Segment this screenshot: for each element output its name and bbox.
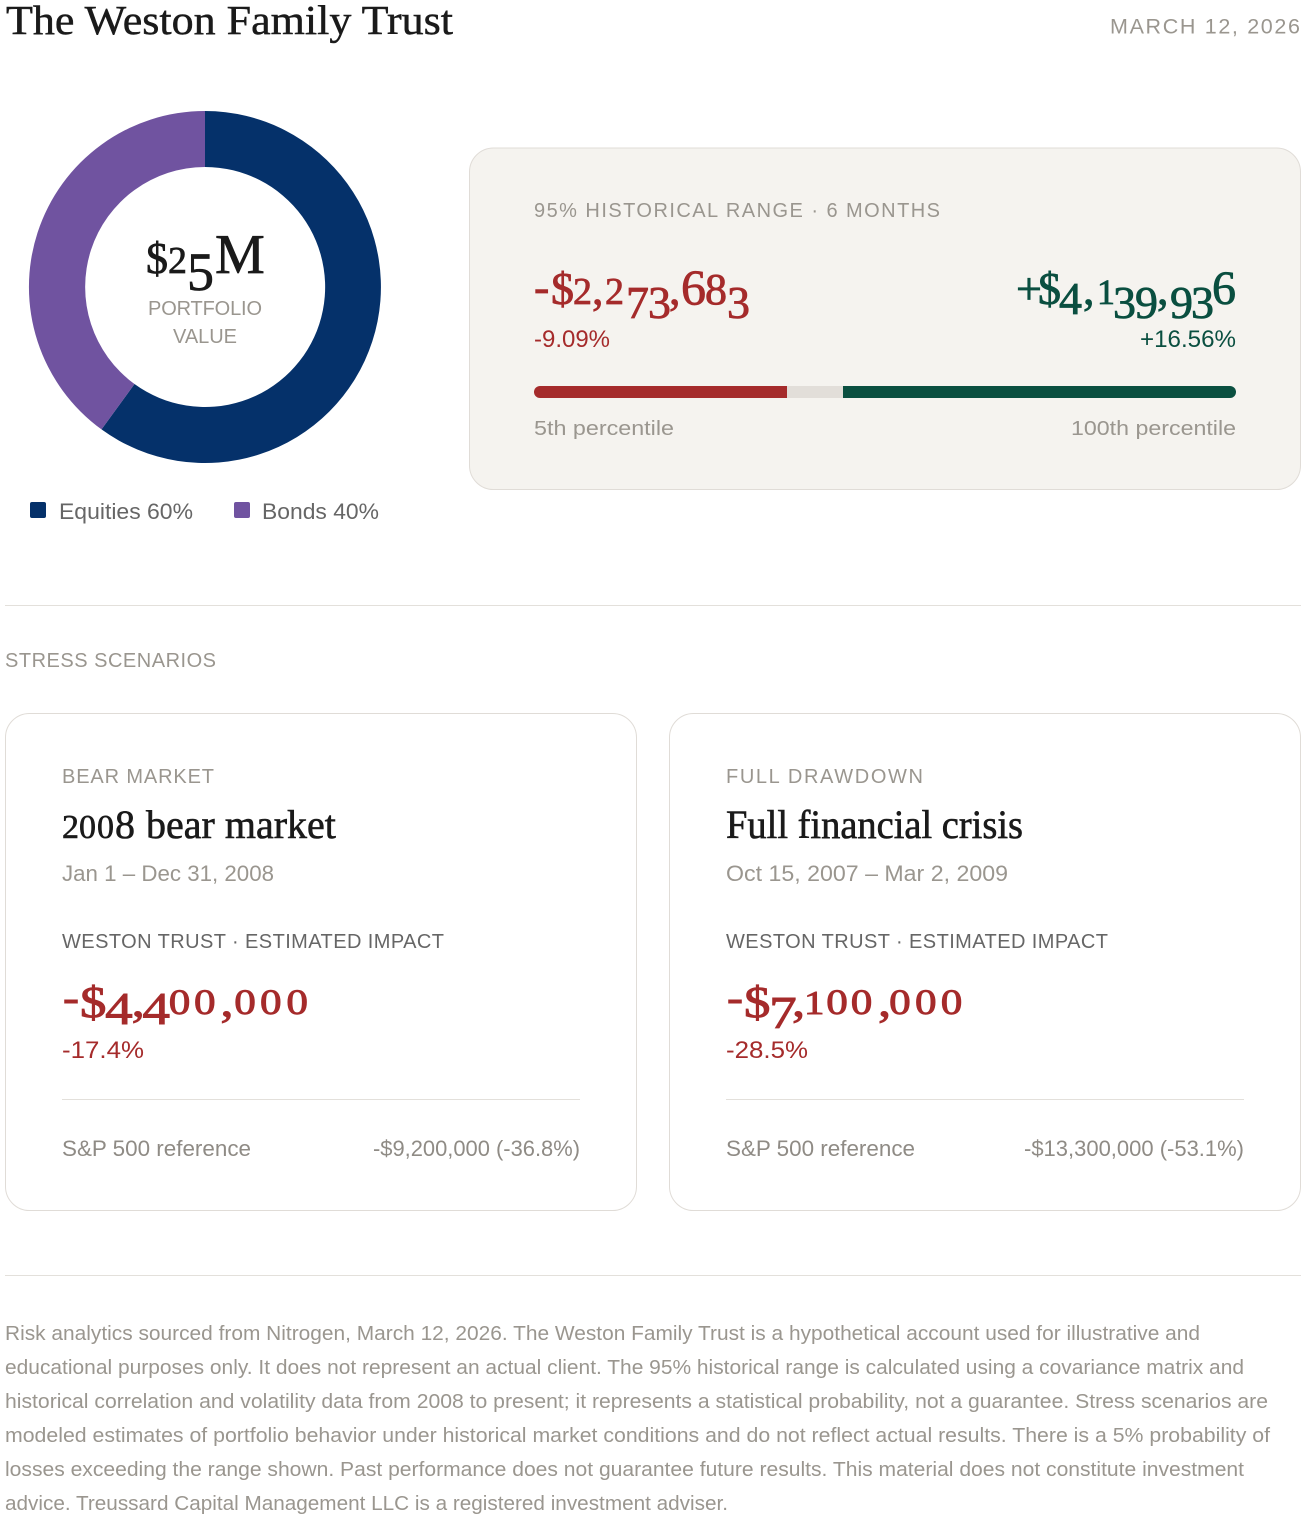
downside value: $ bbox=[551, 263, 574, 314]
scenario name: 2 bbox=[62, 809, 79, 846]
downside value: , bbox=[669, 263, 680, 314]
S&P 500 reference row bbox=[726, 1136, 1244, 1161]
donut segment: bonds 40% bbox=[29, 111, 205, 429]
impact value: 0 bbox=[194, 982, 216, 1022]
legend item: equities: Equities 60% bbox=[59, 499, 193, 524]
downside value bbox=[534, 259, 750, 328]
S&P 500 reference row: -$9,200,000 (-36.8%) bbox=[373, 1136, 580, 1161]
upside value: 9 bbox=[1170, 277, 1193, 328]
upside value: , bbox=[1083, 263, 1094, 314]
impact value: 0 bbox=[826, 982, 848, 1022]
upside value: 1 bbox=[1097, 272, 1115, 312]
downside percent: -9.09% bbox=[534, 326, 610, 353]
upside value: , bbox=[1157, 263, 1168, 314]
impact value: $ bbox=[80, 978, 106, 1027]
downside value: 3 bbox=[727, 277, 750, 328]
impact value: 0 bbox=[286, 982, 308, 1022]
footnote disclaimer bbox=[5, 1323, 1270, 1515]
scenario type: BEAR MARKET bbox=[62, 766, 214, 788]
portfolio value: 5 bbox=[187, 242, 214, 302]
S&P 500 reference row bbox=[62, 1136, 580, 1161]
impact value: , bbox=[132, 977, 145, 1026]
impact percent: -28.5% bbox=[726, 1037, 808, 1064]
legend bbox=[30, 499, 379, 524]
upside value: + bbox=[1016, 263, 1042, 314]
impact percent: -17.4% bbox=[62, 1037, 144, 1064]
legend item: bonds: Bonds 40% bbox=[262, 499, 379, 524]
impact label: WESTON TRUST · ESTIMATED IMPACT bbox=[62, 931, 444, 953]
downside value: - bbox=[534, 261, 549, 312]
impact value: , bbox=[220, 977, 234, 1026]
footnote disclaimer: Risk analytics sourced from Nitrogen, March 12, 2026. The Weston Family Trust is a hypothetical account used for illustrative and bbox=[5, 1323, 1200, 1345]
downside value: 8 bbox=[705, 265, 727, 314]
S&P 500 reference row: S&P 500 reference bbox=[726, 1136, 915, 1161]
upside value bbox=[1016, 262, 1236, 328]
scenario name bbox=[62, 802, 336, 847]
impact value bbox=[63, 976, 308, 1034]
panel: full drawdown scenario bbox=[670, 714, 1300, 1210]
panel: bear market scenario bbox=[6, 714, 636, 1210]
impact value: 4 bbox=[142, 983, 170, 1034]
donut segment: equities 60% bbox=[102, 111, 381, 463]
impact value: 0 bbox=[169, 982, 190, 1022]
scenario name: bear market bbox=[146, 802, 336, 847]
upside value: $ bbox=[1038, 263, 1061, 314]
upside value: 4 bbox=[1059, 273, 1082, 324]
donut chart: allocation bbox=[29, 111, 381, 463]
scenario name: 0 bbox=[79, 809, 96, 846]
impact value: - bbox=[63, 976, 79, 1020]
S&P 500 reference row: -$13,300,000 (-53.1%) bbox=[1024, 1136, 1244, 1161]
percentile labels: 5th percentile bbox=[534, 417, 674, 440]
scenario dates: Oct 15, 2007 – Mar 2, 2009 bbox=[726, 861, 1008, 886]
portfolio value label: PORTFOLIO bbox=[148, 298, 262, 320]
footnote disclaimer: modeled estimates of portfolio behavior under historical market conditions and do not reflect actual results. There is a 5% probability of bbox=[5, 1425, 1270, 1447]
impact value: 4 bbox=[105, 983, 133, 1034]
impact value: 0 bbox=[234, 982, 256, 1022]
downside value: 6 bbox=[681, 259, 706, 315]
portfolio value bbox=[146, 224, 265, 302]
impact label: WESTON TRUST · ESTIMATED IMPACT bbox=[726, 931, 1108, 953]
impact value: - bbox=[727, 976, 743, 1020]
scenario dates: Jan 1 – Dec 31, 2008 bbox=[62, 861, 274, 886]
downside value: 2 bbox=[605, 271, 624, 313]
range heading: 95% HISTORICAL RANGE · 6 MONTHS bbox=[534, 200, 940, 222]
impact value: 0 bbox=[941, 982, 962, 1022]
impact value: $ bbox=[744, 978, 770, 1027]
impact value: 0 bbox=[889, 982, 911, 1022]
portfolio value label: VALUE bbox=[173, 326, 237, 348]
impact value: 1 bbox=[804, 985, 824, 1022]
impact value bbox=[727, 976, 962, 1038]
upside value: 6 bbox=[1212, 262, 1236, 315]
impact value: , bbox=[792, 977, 805, 1026]
upside value: 3 bbox=[1191, 277, 1214, 328]
downside value: , bbox=[592, 263, 604, 314]
footnote disclaimer: educational purposes only. It does not represent an actual client. The 95% historical range is calculated using a covariance matrix and bbox=[5, 1357, 1244, 1379]
impact value: , bbox=[878, 977, 891, 1026]
range bar bbox=[534, 386, 1236, 398]
portfolio value: 2 bbox=[168, 240, 187, 282]
impact value: 0 bbox=[851, 982, 872, 1022]
percentile labels: 100th percentile bbox=[1071, 417, 1236, 440]
portfolio value: M bbox=[215, 224, 265, 286]
impact value: 0 bbox=[260, 982, 282, 1022]
footnote disclaimer: historical correlation and volatility data from 2008 to present; it represents a statistical probability, not a guarantee. Stress scenarios are bbox=[5, 1391, 1268, 1413]
upside value: 3 bbox=[1113, 277, 1136, 328]
downside value: 3 bbox=[648, 277, 671, 328]
scenario name: 8 bbox=[115, 802, 135, 847]
scenario type: FULL DRAWDOWN bbox=[726, 766, 923, 788]
upside percent: +16.56% bbox=[1140, 326, 1236, 353]
downside value: 7 bbox=[626, 277, 649, 328]
scenario name: 0 bbox=[97, 809, 114, 846]
downside value: 2 bbox=[573, 271, 592, 313]
S&P 500 reference row: S&P 500 reference bbox=[62, 1136, 251, 1161]
footnote disclaimer: losses exceeding the range shown. Past performance does not guarantee future results. This material does not constitute investment bbox=[5, 1459, 1244, 1481]
percentile labels bbox=[534, 417, 1236, 440]
impact value: 0 bbox=[915, 982, 937, 1022]
portfolio value: $ bbox=[146, 234, 168, 283]
report date: MARCH 12, 2026 bbox=[1110, 14, 1300, 38]
section heading: stress scenarios: STRESS SCENARIOS bbox=[5, 650, 216, 672]
impact value: 7 bbox=[769, 987, 797, 1038]
footnote disclaimer: advice. Treussard Capital Management LLC is a registered investment adviser. bbox=[5, 1493, 728, 1515]
panel: historical range bbox=[470, 148, 1300, 490]
scenario name: Full financial crisis bbox=[726, 802, 1023, 847]
upside value: 9 bbox=[1135, 277, 1158, 328]
portfolio value label bbox=[148, 298, 262, 348]
